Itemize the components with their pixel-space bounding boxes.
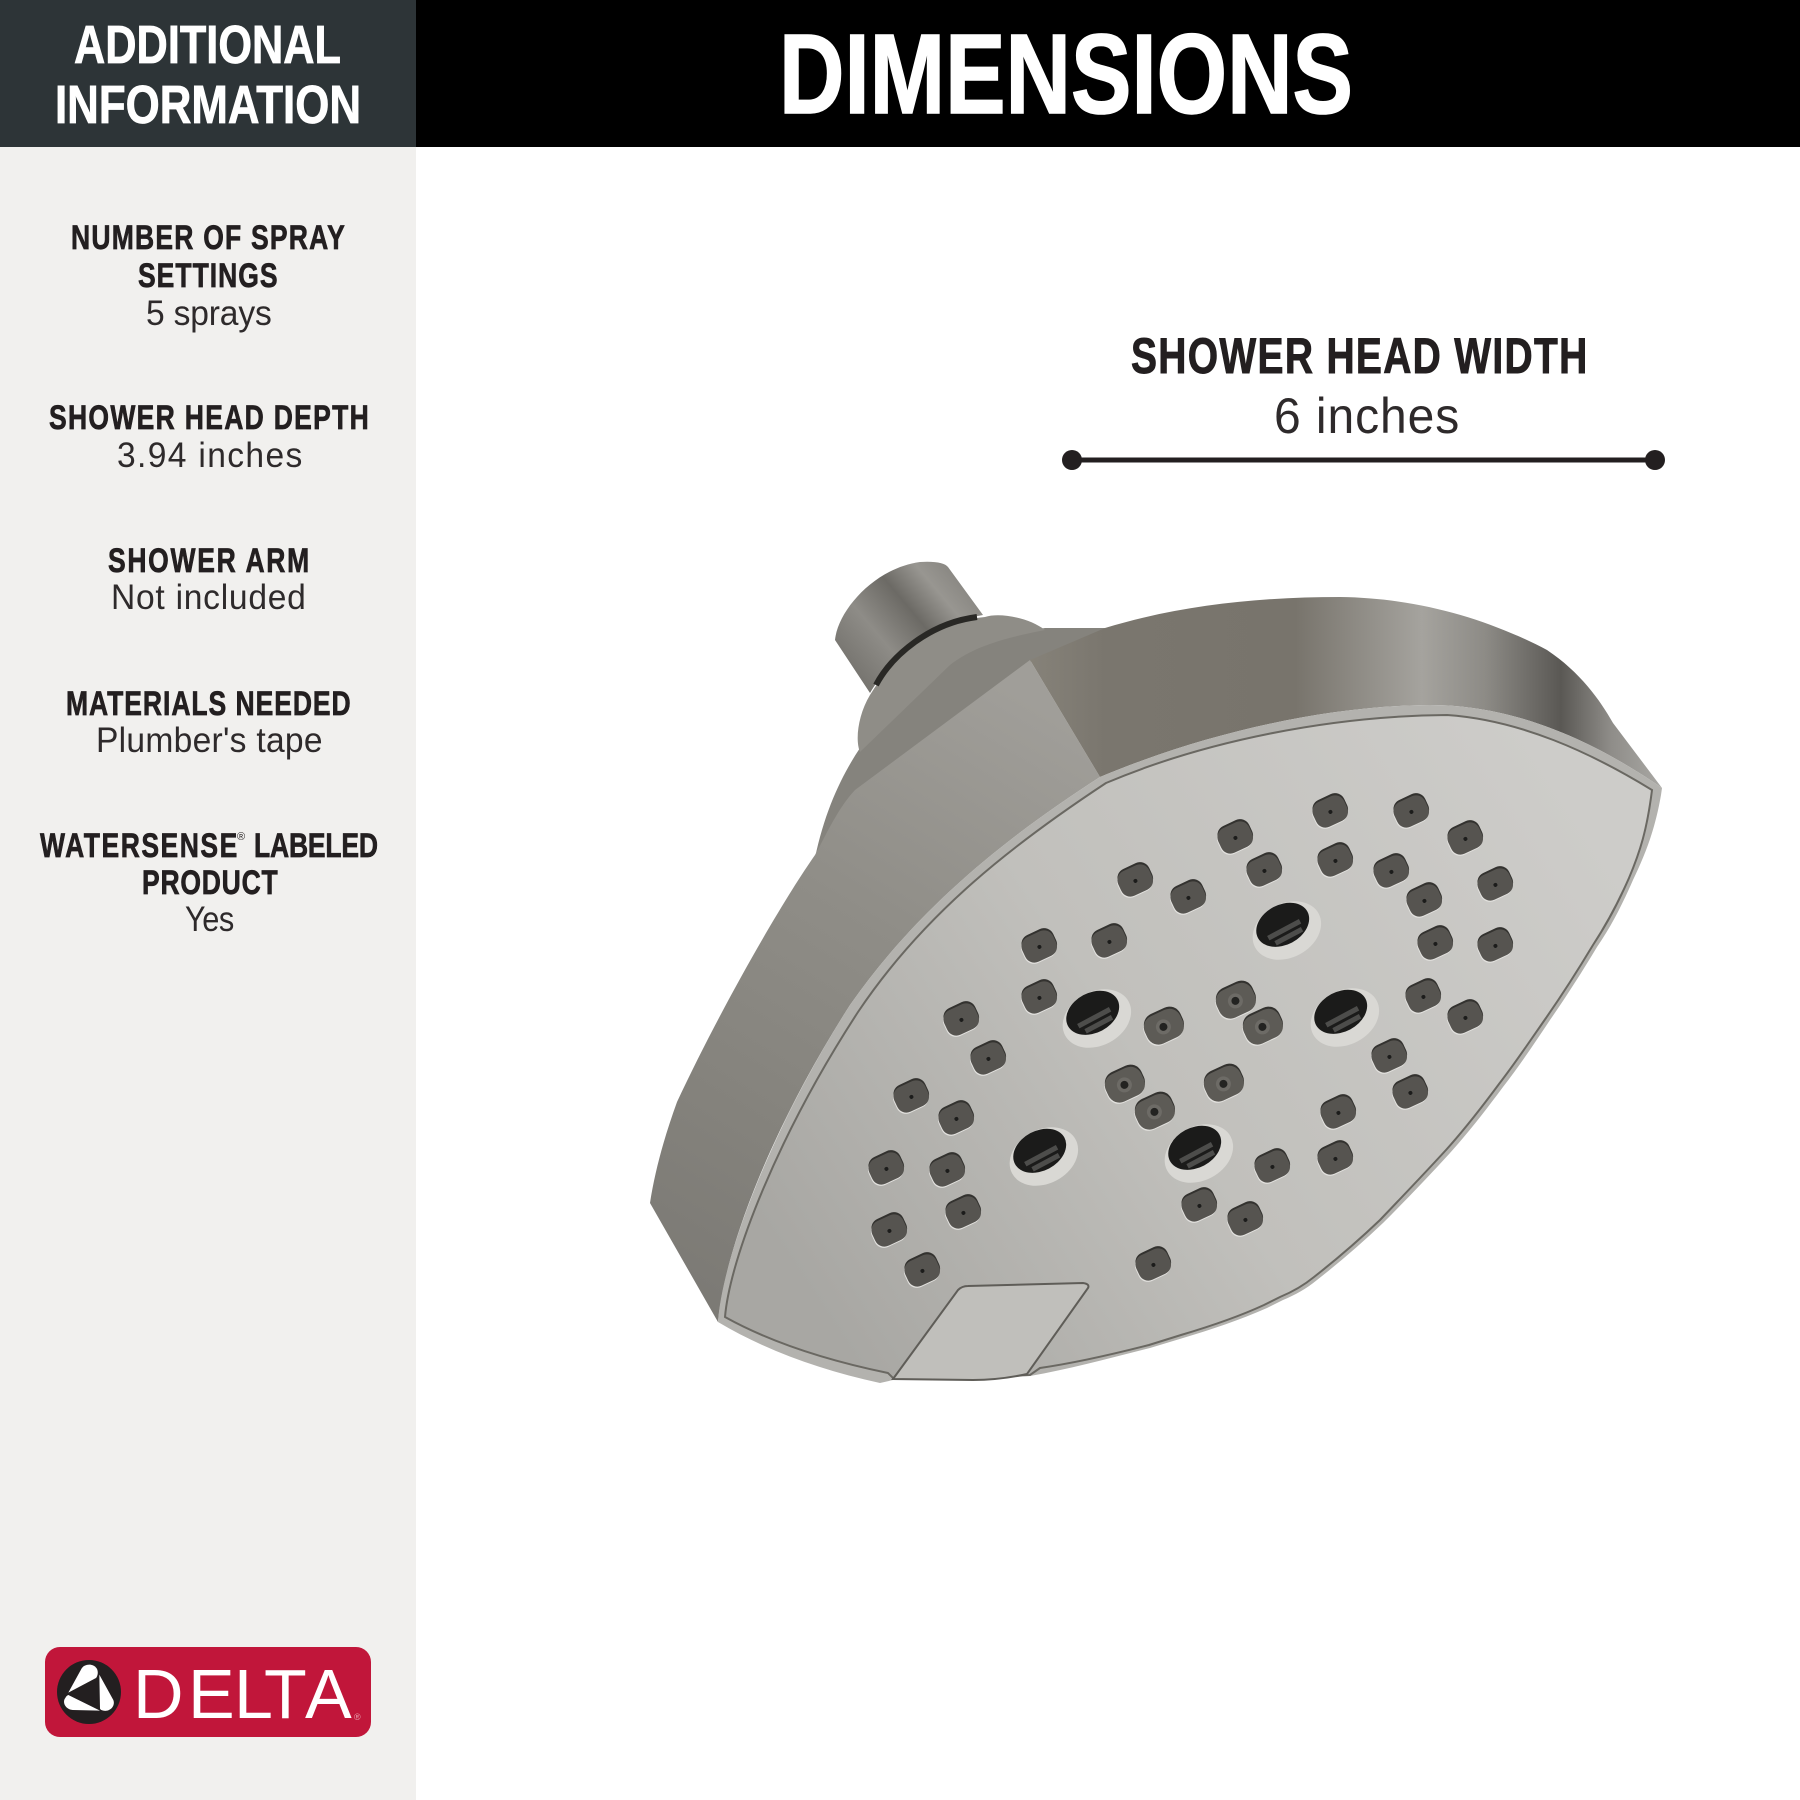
sidebar heading: INFORMATION: [55, 75, 361, 135]
spec: shower arm: SHOWER ARM: [108, 542, 309, 580]
shoulder behind head: [815, 628, 1110, 858]
logo: Delta: DELTA: [133, 1655, 352, 1733]
spec: materials needed: MATERIALS NEEDED: [66, 685, 351, 723]
spec: shower head depth: SHOWER HEAD DEPTH: [49, 399, 369, 437]
face rim: [718, 705, 1662, 1383]
spec: watersense labeled product: [40, 827, 378, 938]
spec: shower head depth: 3.94 inches: [117, 436, 302, 475]
sidebar heading: ADDITIONAL: [74, 15, 341, 75]
body: top band: [1030, 597, 1662, 788]
spray nozzles: outer rings: [863, 790, 1518, 1291]
logo: Delta: [45, 1647, 371, 1737]
spec: shower head depth: [49, 399, 369, 475]
shower arm stub: [835, 562, 983, 693]
selector tab: [893, 1283, 1088, 1380]
width dimension line: [1062, 450, 1665, 470]
sidebar heading: [0, 0, 416, 147]
spec: watersense labeled product: LABELED: [254, 827, 378, 865]
callout: shower head width: SHOWER HEAD WIDTH: [1131, 327, 1587, 384]
dark ring between arm and collar: [876, 617, 977, 685]
spec: watersense labeled product: WATERSENSE: [40, 827, 237, 865]
shower head illustration: [650, 562, 1662, 1383]
spec: number of spray settings: [71, 219, 345, 333]
spec: number of spray settings: SETTINGS: [138, 257, 278, 295]
callout: shower head width: 6 inches: [1274, 389, 1459, 444]
spec: materials needed: Plumber's tape: [96, 721, 323, 760]
spray holes: large: [999, 890, 1389, 1197]
title bar: dimensions: DIMENSIONS: [779, 11, 1353, 137]
spec: watersense labeled product: ®: [237, 831, 245, 843]
title bar: dimensions: [416, 0, 1800, 147]
logo: Delta: ®: [354, 1712, 361, 1722]
collar: [858, 615, 1045, 752]
callout: shower head width: [1062, 327, 1665, 470]
spec: number of spray settings: NUMBER OF SPRAY: [71, 219, 345, 257]
spec: number of spray settings: 5 sprays: [146, 294, 272, 333]
spec: shower arm: [108, 542, 309, 617]
spec: watersense labeled product: PRODUCT: [142, 864, 278, 902]
spec: shower arm: Not included: [111, 578, 306, 617]
panel: additional information sidebar: [0, 0, 416, 1800]
face plate: [725, 715, 1652, 1378]
spec: materials needed: [66, 685, 351, 760]
spec: watersense labeled product: Yes: [185, 899, 234, 938]
spray nozzles: center cluster: [1099, 977, 1288, 1135]
body: left band: [650, 660, 1100, 1322]
